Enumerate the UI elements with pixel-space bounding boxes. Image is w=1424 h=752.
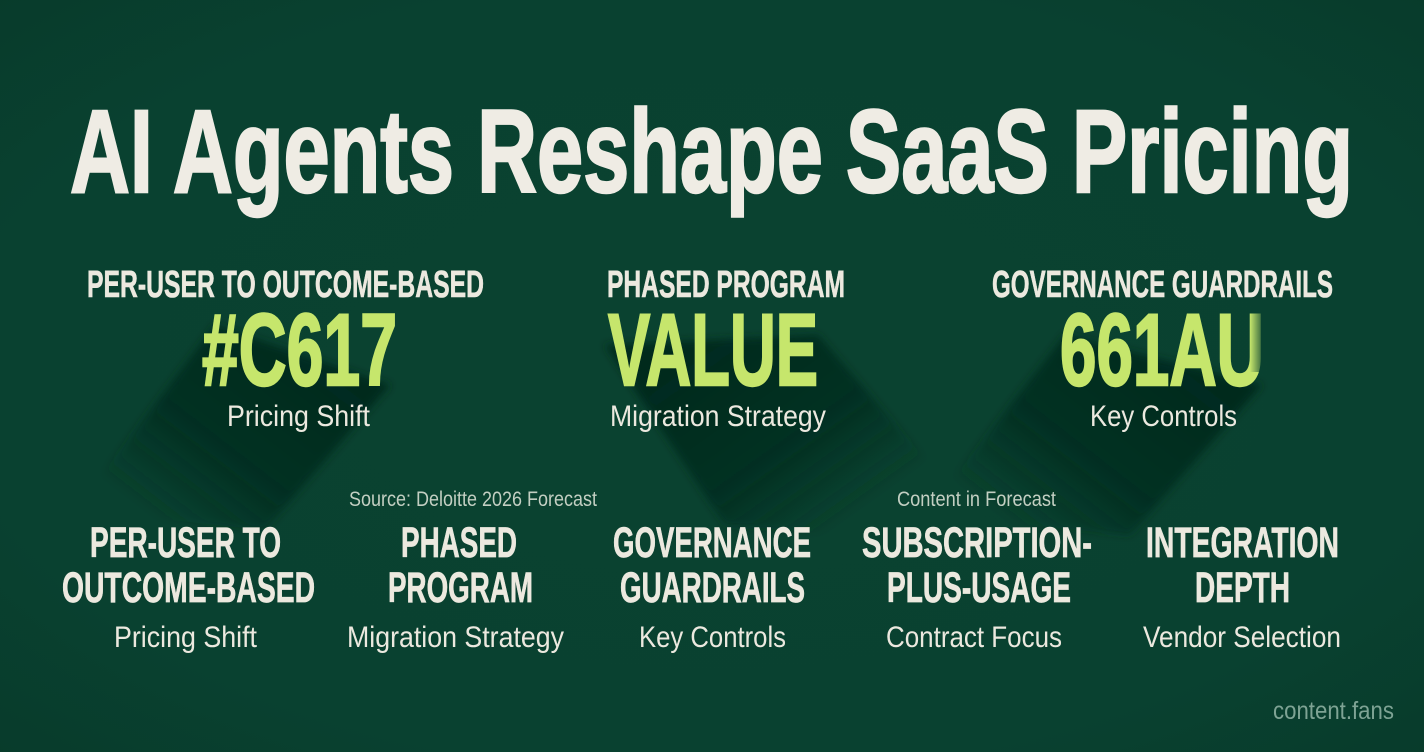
- column: contract focus: [862, 519, 1092, 654]
- column: pricing shift: Pricing Shift: [114, 621, 258, 654]
- panel: migration strategy stat: [607, 264, 845, 433]
- heading: phased program: PHASED PROGRAM: [607, 264, 845, 306]
- label: pricing shift: Pricing Shift: [227, 400, 371, 433]
- label: key controls: Key Controls: [1090, 400, 1237, 433]
- watermark: content.fans: [1273, 697, 1394, 725]
- column: contract focus: PLUS-USAGE: [887, 564, 1071, 612]
- column: key controls: GUARDRAILS: [620, 564, 805, 612]
- column: pricing shift: [62, 519, 315, 654]
- column: vendor selection: [1143, 519, 1341, 654]
- heading: per-user to outcome-based: PER-USER TO OUTCOME-BASED: [87, 264, 484, 306]
- value: VALUE: VALUE: [608, 293, 818, 407]
- fade over U stem: [1250, 308, 1266, 372]
- source note: Source: Deloitte 2026 Forecast: [349, 488, 597, 511]
- column: key controls: Key Controls: [639, 621, 786, 654]
- shadow: third stat: [925, 335, 1262, 535]
- column: migration strategy: PROGRAM: [388, 564, 533, 612]
- panel: key controls stat: [992, 264, 1333, 433]
- column: contract focus: SUBSCRIPTION-: [862, 519, 1092, 567]
- label: migration strategy: Migration Strategy: [610, 400, 826, 433]
- column: key controls: [613, 519, 811, 654]
- column: migration strategy: [347, 519, 564, 654]
- column: contract focus: Contract Focus: [886, 621, 1062, 654]
- shadow: second stat: [605, 335, 935, 535]
- column: migration strategy: Migration Strategy: [347, 621, 564, 654]
- column: vendor selection: Vendor Selection: [1143, 621, 1341, 654]
- column: key controls: GOVERNANCE: [613, 519, 811, 567]
- content note: Content in Forecast: [897, 488, 1056, 511]
- column: vendor selection: DEPTH: [1195, 564, 1290, 612]
- shadow: first stat: [75, 325, 390, 530]
- column: pricing shift: PER-USER TO: [90, 519, 281, 567]
- column: pricing shift: OUTCOME-BASED: [62, 564, 315, 612]
- value: #C617: #C617: [202, 293, 397, 407]
- column: migration strategy: PHASED: [401, 519, 517, 567]
- value: 661AU: 661AU: [1060, 293, 1264, 407]
- panel: pricing shift stat: [87, 264, 484, 433]
